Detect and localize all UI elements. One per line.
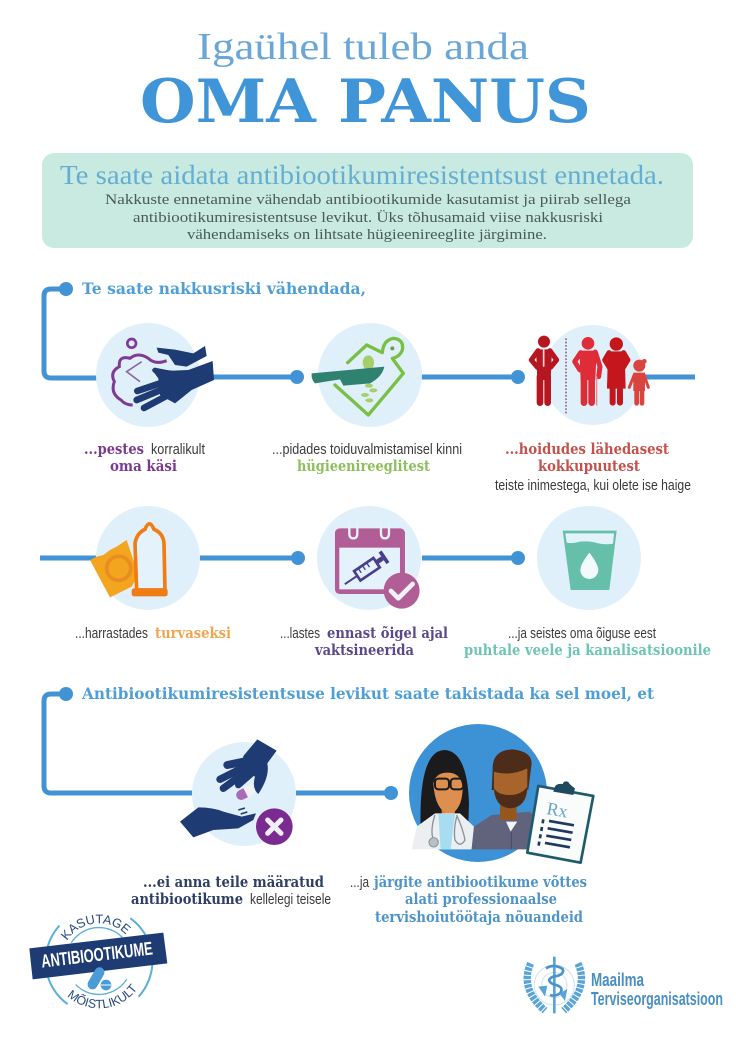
caption: safe sex — [75, 625, 231, 642]
badge: use antibiotics wisely: KASUTAGE — [60, 914, 131, 940]
icon: food safety cutting board — [312, 323, 422, 427]
title — [140, 26, 591, 137]
badge: use antibiotics wisely: ANTIBIOOTIKUME — [40, 938, 154, 972]
caption: follow professional advice: tervishoiutöötaja nõuandeid — [375, 909, 583, 926]
caption: follow professional advice — [350, 874, 587, 926]
caption: food hygiene: ...pidades toiduvalmistamisel kinni — [272, 441, 462, 458]
caption: do not share: antibiootikume — [131, 891, 243, 908]
caption: vaccination: ...lastes — [280, 625, 320, 642]
caption: wash hands: ...pestes — [84, 441, 144, 458]
icon: doctors and prescription: Rx — [545, 798, 569, 822]
caption: avoid close contact: teiste inimestega, kui olete ise haige — [495, 477, 691, 494]
icon: water glass — [537, 506, 641, 610]
panel: intro: vähendamiseks on lihtsate hügieenireeglite järgimine. — [187, 227, 547, 243]
logo: WHO: Maailma — [591, 970, 645, 990]
title: OMA PANUS — [140, 67, 591, 137]
connector: row 3 — [44, 687, 398, 800]
caption: avoid close contact: kokkupuutest — [538, 458, 640, 475]
panel: intro: Te saate aidata antibiootikumiresistentsust ennetada. — [60, 160, 664, 190]
caption: clean water — [464, 625, 711, 659]
caption: vaccination: ennast õigel ajal — [327, 625, 448, 642]
logo: WHO — [527, 957, 723, 1013]
icon: condom — [90, 506, 200, 610]
caption: follow professional advice: järgite antibiootikume võttes — [372, 874, 587, 891]
caption: do not share: ...ei anna teile määratud — [143, 874, 324, 891]
title: Igaühel tuleb anda — [197, 26, 529, 68]
caption: clean water: puhtale veele ja kanalisatsioonile — [464, 642, 711, 659]
caption: do not share — [131, 874, 331, 908]
caption: wash hands — [84, 441, 206, 475]
badge: use antibiotics wisely: MÕISTLIKULT — [68, 983, 136, 1008]
caption: avoid close contact: ...hoidudes lähedasest — [505, 441, 669, 458]
caption: safe sex: ...harrastades — [75, 625, 148, 642]
icon: doctors and prescription — [409, 724, 593, 863]
panel: intro: Nakkuste ennetamine vähendab antibiootikumide kasutamist ja piirab sellega — [105, 192, 631, 208]
panel: intro: antibiootikumiresistentsuse levikut. Üks tõhusamaid viise nakkusriski — [133, 209, 603, 226]
panel: intro — [42, 153, 693, 248]
caption: wash hands: korralikult — [151, 441, 206, 458]
caption: safe sex: turvaseksi — [155, 625, 231, 642]
connector: row 1 — [44, 282, 695, 384]
heading: prevent spread: Antibiootikumiresistentsuse levikut saate takistada ka sel moel, et — [81, 684, 655, 703]
caption: food hygiene: hügieenireeglitest — [297, 458, 430, 475]
caption: avoid close contact — [495, 441, 691, 494]
heading: reduce infection risk: Te saate nakkusriski vähendada, — [82, 279, 366, 298]
caption: do not share: kellelegi teisele — [250, 891, 331, 908]
caption: vaccination: vaktsineerida — [314, 642, 415, 659]
caption: follow professional advice: alati professionaalse — [405, 891, 557, 908]
icon: keeping distance people — [531, 325, 648, 425]
icon: hand washing — [96, 323, 214, 427]
caption: wash hands: oma käsi — [110, 458, 177, 475]
icon: vaccination calendar — [317, 506, 421, 610]
caption: vaccination — [280, 625, 448, 659]
connector: row 2 — [40, 551, 525, 565]
caption: clean water: ...ja seistes oma õiguse eest — [508, 625, 657, 642]
icon: do not share antibiotics — [180, 739, 296, 846]
caption: follow professional advice: ...ja — [350, 874, 370, 891]
badge: use antibiotics wisely — [29, 914, 168, 1008]
caption: food hygiene — [272, 441, 462, 475]
